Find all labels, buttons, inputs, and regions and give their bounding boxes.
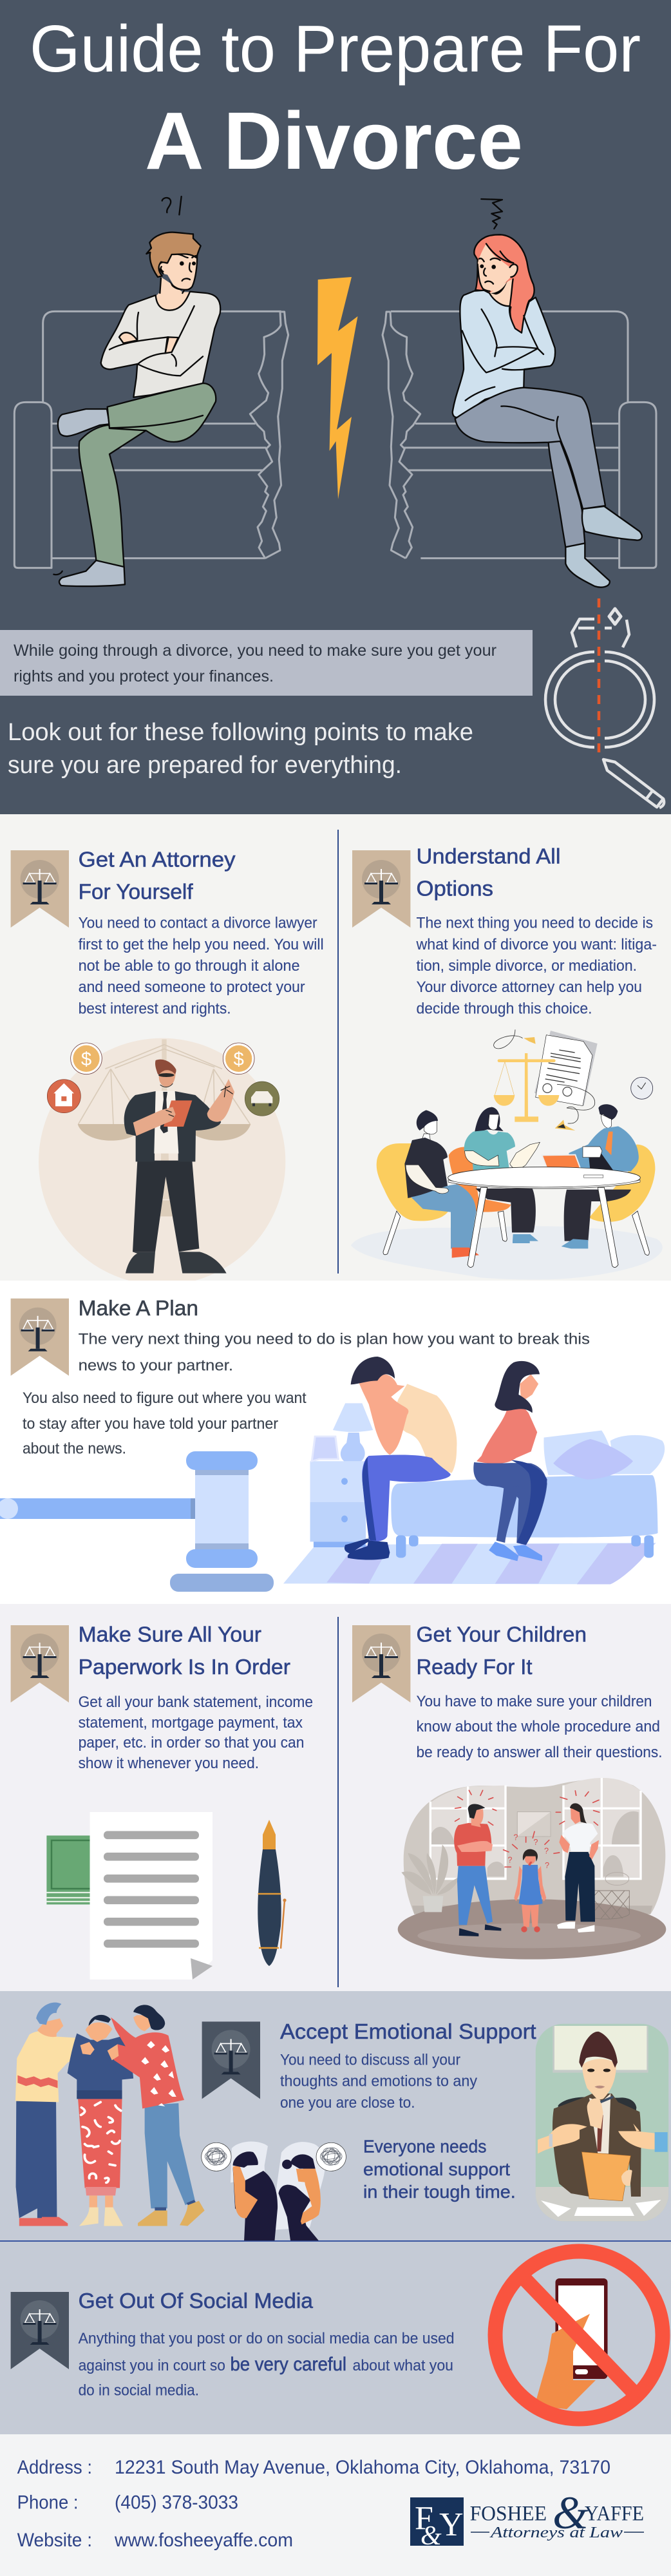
title: Guide to Prepare For	[30, 12, 641, 86]
text block: look out: Look out for these following points to make	[8, 719, 473, 746]
scale	[78, 1039, 250, 1216]
text block: support body	[280, 2051, 477, 2112]
contact details: 12231 South May Avenue, Oklahoma City, Oklahoma, 73170	[115, 2457, 610, 2478]
question mark and slash	[162, 196, 182, 215]
text block: social media body: about what you	[353, 2357, 453, 2374]
child	[514, 1849, 546, 1932]
question marks: ?	[544, 1846, 549, 1855]
ribbon icon: scales 3	[11, 1299, 69, 1376]
coin right	[223, 1043, 254, 1074]
icon: lightning bolt	[317, 277, 358, 499]
divider	[0, 2240, 671, 2242]
ribbon icon: scales 5	[352, 1625, 410, 1703]
heading: get an attorney	[79, 848, 236, 903]
icon: no phone sign	[495, 2251, 663, 2419]
text block: attorney body: best interest and rights.	[79, 1000, 231, 1018]
table and laptop	[448, 1155, 640, 1267]
text block: options body: The next thing you need to decide is	[416, 914, 653, 931]
illustration: arguing family	[398, 1778, 666, 1960]
text block: options body	[416, 914, 657, 1018]
text block: paperwork body	[79, 1693, 313, 1772]
paper document	[534, 1031, 598, 1106]
text block: attorney body: You need to contact a divorce lawyer	[79, 914, 317, 931]
contact details: (405) 378-3033	[115, 2492, 238, 2514]
logo: YAFFE	[585, 2503, 644, 2526]
rug	[283, 1543, 656, 1584]
mother	[557, 1803, 599, 1932]
icon: broken ring and pencil	[545, 598, 664, 808]
text block: social media body: Anything that you post or do on social media can be used	[79, 2330, 455, 2347]
logo	[410, 2487, 644, 2551]
supporting hands	[80, 2042, 118, 2060]
question marks: ?	[533, 1838, 538, 1847]
person in black tee	[404, 1110, 479, 1258]
text block: look out: sure you are prepared for everything.	[8, 752, 402, 779]
red marks	[455, 1790, 600, 1867]
text block: plan intro: The very next thing you need to do is plan how you want to break this	[79, 1331, 590, 1348]
car badge	[245, 1082, 279, 1116]
heading: accept emotional support: Accept Emotional Support	[280, 2019, 536, 2043]
heading: paperwork: Make Sure All Your	[79, 1622, 261, 1646]
contact details: Website :	[17, 2530, 92, 2551]
illustration: man on torn sofa	[14, 196, 288, 586]
lamp	[333, 1403, 373, 1461]
text block: social media body	[79, 2330, 455, 2399]
squiggle	[481, 199, 502, 229]
text block: social media body: do in social media.	[79, 2382, 199, 2399]
panel: dark header	[0, 0, 671, 814]
coin right: $	[234, 1049, 244, 1070]
panel: intro strip: rights and you protect your finances.	[14, 667, 274, 685]
heading: make a plan: Make A Plan	[79, 1296, 198, 1320]
dashed cut line	[598, 598, 600, 756]
text block: attorney body: first to get the help you need. You will	[79, 936, 324, 953]
paper plane trails and clock	[494, 1029, 653, 1131]
heading: understand all options	[416, 844, 560, 901]
panel: light section with attorney and options	[0, 814, 671, 1285]
basket	[582, 1873, 629, 1919]
illustration: couple on bed	[283, 1357, 665, 1584]
text block: support body: You need to discuss all your	[280, 2051, 460, 2069]
panel: intro strip: While going through a divorce, you need to make sure you get your	[14, 642, 496, 660]
coin left	[71, 1043, 102, 1074]
logo: Attorneys at Law	[489, 2524, 623, 2541]
text block: options body: Your divorce attorney can help you	[416, 978, 642, 996]
heading: get an attorney: Get An Attorney	[79, 848, 236, 872]
ribbon icon: scales 7	[11, 2292, 69, 2369]
raised hand and pen	[587, 2099, 603, 2129]
man figure	[53, 233, 220, 586]
text block: options body: tion, simple divorce, or mediation.	[416, 957, 637, 975]
text block: support body: one you are close to.	[280, 2094, 415, 2112]
person in teal top	[464, 1107, 540, 1243]
thought bubbles and sad pair	[202, 2142, 346, 2240]
contact details: Phone :	[17, 2492, 79, 2514]
text block: plan details: You also need to figure out where you want	[23, 1389, 307, 1407]
text block: children body	[416, 1693, 662, 1761]
panel: make a plan	[0, 1281, 671, 1604]
sad woman	[473, 1361, 547, 1561]
illustration: gavel	[0, 1451, 274, 1592]
title	[30, 12, 641, 186]
icon: document	[90, 1812, 213, 1980]
text block: attorney body: and need someone to protect your	[79, 978, 305, 996]
question marks: ?	[507, 1856, 512, 1865]
jacket	[553, 2094, 641, 2197]
illustration: friends supporting	[15, 2003, 346, 2240]
plant	[401, 1844, 459, 1912]
windows	[430, 1778, 641, 1879]
text block: children body: be ready to answer all their questions.	[416, 1744, 662, 1761]
divider	[337, 1617, 339, 1987]
father	[454, 1804, 501, 1936]
text block: children body: know about the whole procedure and	[416, 1718, 660, 1735]
sad man	[345, 1357, 457, 1560]
heading: paperwork: Paperwork Is In Order	[79, 1655, 290, 1679]
pointing hands	[538, 2124, 668, 2153]
illustration: man at desk	[536, 2024, 668, 2221]
attorney figure	[124, 1060, 234, 1274]
illustration: team meeting	[351, 1029, 663, 1280]
text block: support body: thoughts and emotions to any	[280, 2072, 477, 2090]
heading: understand all options: Understand All	[416, 844, 560, 868]
contact details: www.fosheeyaffe.com	[114, 2530, 293, 2551]
coin left: $	[81, 1049, 91, 1070]
woman figure	[453, 234, 642, 587]
question marks	[507, 1833, 549, 1870]
yellow scale	[494, 1053, 559, 1122]
heading: children: Get Your Children	[416, 1622, 587, 1646]
heading: get out of social media: Get Out Of Social Media	[79, 2289, 314, 2313]
text block: plan intro	[79, 1331, 590, 1374]
text block: attorney body	[79, 914, 324, 1018]
text block: social media body: be very careful	[231, 2354, 346, 2375]
text block: plan details: about the news.	[23, 1440, 126, 1457]
text block: options body: decide through this choice.	[416, 1000, 592, 1018]
heading: get an attorney: For Yourself	[79, 879, 193, 903]
text block: paperwork body: paper, etc. in order so that you can	[79, 1734, 304, 1751]
text block: plan details: to stay after you have told your partner	[23, 1415, 278, 1433]
heading: children: Ready For It	[416, 1655, 532, 1679]
panel: paperwork and children	[0, 1604, 671, 1991]
text block: paperwork body: Get all your bank statement, income	[79, 1693, 313, 1711]
ribbon icon: scales 6	[202, 2021, 260, 2099]
logo: &	[553, 2487, 589, 2539]
title: A Divorce	[145, 95, 523, 186]
callout: everyone needs support	[363, 2136, 516, 2202]
ribbon icon: scales 2	[352, 850, 410, 928]
photo frame	[312, 1436, 338, 1461]
logo: FOSHEE	[470, 2503, 547, 2526]
icon: fountain pen	[258, 1820, 287, 1966]
house badge	[47, 1080, 80, 1113]
man in sweater	[15, 2003, 95, 2226]
nightstand	[310, 1461, 366, 1547]
callout: everyone needs support: emotional support	[363, 2159, 510, 2179]
icon: money stack	[46, 1836, 93, 1904]
ribbon icon: scales 1	[11, 850, 69, 928]
heading: paperwork	[79, 1622, 290, 1679]
person in blue shirt	[562, 1104, 639, 1248]
panel: emotional support and social media	[0, 1991, 671, 2434]
sofa right half	[383, 311, 656, 568]
text block: paperwork body: show it whenever you need.	[79, 1755, 259, 1772]
floor	[398, 1899, 666, 1960]
callout: everyone needs support: in their tough time.	[363, 2182, 516, 2202]
center person	[68, 2015, 133, 2226]
contact details	[17, 2457, 610, 2551]
callout: everyone needs support: Everyone needs	[363, 2136, 487, 2156]
logo: F	[415, 2500, 433, 2537]
ribbon icon: scales 4	[11, 1625, 69, 1703]
contact details: Address :	[17, 2457, 92, 2478]
question marks: ?	[513, 1833, 518, 1842]
panel: intro strip	[0, 630, 533, 696]
chairs	[377, 1143, 655, 1255]
illustration: attorney with scales	[39, 1038, 285, 1285]
chair	[558, 2097, 636, 2117]
divider	[337, 830, 339, 1274]
sofa left half	[14, 311, 288, 568]
logo: Y	[439, 2506, 464, 2543]
text block: attorney body: not be able to go through it alone	[79, 957, 300, 975]
text block: social media body: against you in court so	[79, 2357, 225, 2374]
text block: look out	[8, 719, 473, 779]
question marks: ?	[545, 1861, 549, 1870]
text block: options body: what kind of divorce you want: litiga-	[416, 936, 657, 953]
text block: paperwork body: statement, mortgage payment, tax	[79, 1714, 303, 1732]
panel: footer	[0, 2434, 671, 2576]
bed	[391, 1431, 665, 1558]
logo: &	[421, 2521, 442, 2551]
heading: understand all options: Options	[416, 876, 493, 901]
illustration: woman on torn sofa	[383, 199, 656, 587]
woman in heart top	[108, 2005, 205, 2226]
heading: children	[416, 1622, 587, 1679]
text block: plan intro: news to your partner.	[79, 1357, 233, 1374]
text block: children body: You have to make sure your children	[416, 1693, 652, 1710]
text block: plan details	[23, 1389, 307, 1457]
folder	[581, 2152, 630, 2201]
face	[579, 2032, 618, 2100]
